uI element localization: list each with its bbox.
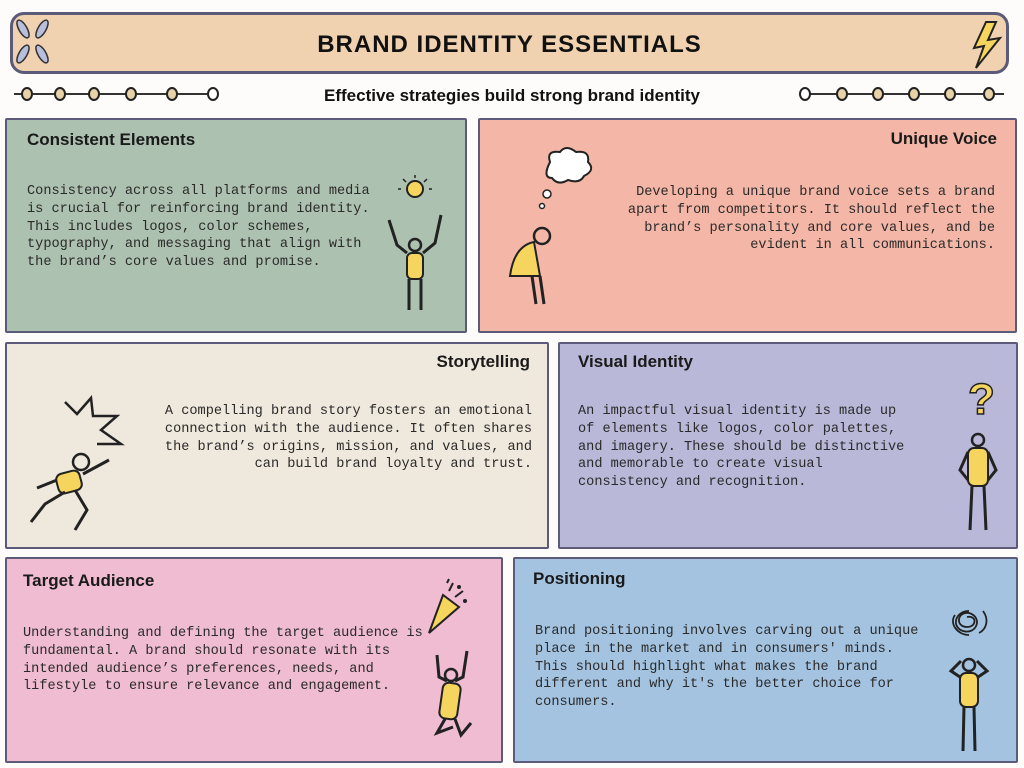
title: BRAND IDENTITY ESSENTIALS [317,31,702,58]
heading: Positioning [533,569,626,588]
decoration: right bead chain [799,87,1004,101]
text block: An impactful visual identity is made up of elements like logos, color palettes, and imagery. These should be distinctive and memorable to create visual consistency and recognition. [578,404,904,490]
heading: Consistent Elements [27,130,195,149]
icon: person with question mark: ? [968,375,995,424]
icon: jumping person with party popper [428,578,472,738]
panel: consistent elements [5,118,467,333]
text block: A compelling brand story fosters an emotional connection with the audience. It often shares the brand’s origins, mission, and values, and can build brand loyalty and trust. [165,404,532,472]
subtitle: Effective strategies build strong brand identity [324,86,700,105]
panel: storytelling [5,342,549,549]
panel: positioning [513,557,1018,763]
icon: person with lightbulb [388,175,442,310]
icon: running person with burst [30,395,125,531]
icon: lightning [972,21,1002,69]
heading: Unique Voice [891,129,997,148]
heading: Visual Identity [578,352,693,371]
heading: Target Audience [23,571,154,590]
text block: Consistency across all platforms and media is crucial for reinforcing brand identity. This includes logos, color schemes, typography, and messaging that align with the brand’s core values and promise. [27,184,370,270]
title banner [10,12,1009,74]
text block: Developing a unique brand voice sets a brand apart from competitors. It should reflect the brand’s personality and core values, and be evident in all communications. [628,185,995,253]
heading: Storytelling [436,352,530,371]
icon: person with question mark [958,375,998,530]
text block: Understanding and defining the target audience is fundamental. A brand should resonate with its intended audience’s preferences, needs, and lifestyle to ensure relevance and engagement. [23,626,423,694]
icon: petals [16,19,49,64]
text block: Brand positioning involves carving out a unique place in the market and in consumers' minds. This should highlight what makes the brand different and why it's the better choice for consumers. [535,624,918,710]
panel: unique voice [478,118,1017,333]
panel: target audience [5,557,503,763]
panel: visual identity [558,342,1018,549]
icon: person with scribble [948,610,990,751]
decoration: left bead chain [14,87,219,101]
icon: thinking person [508,147,592,304]
